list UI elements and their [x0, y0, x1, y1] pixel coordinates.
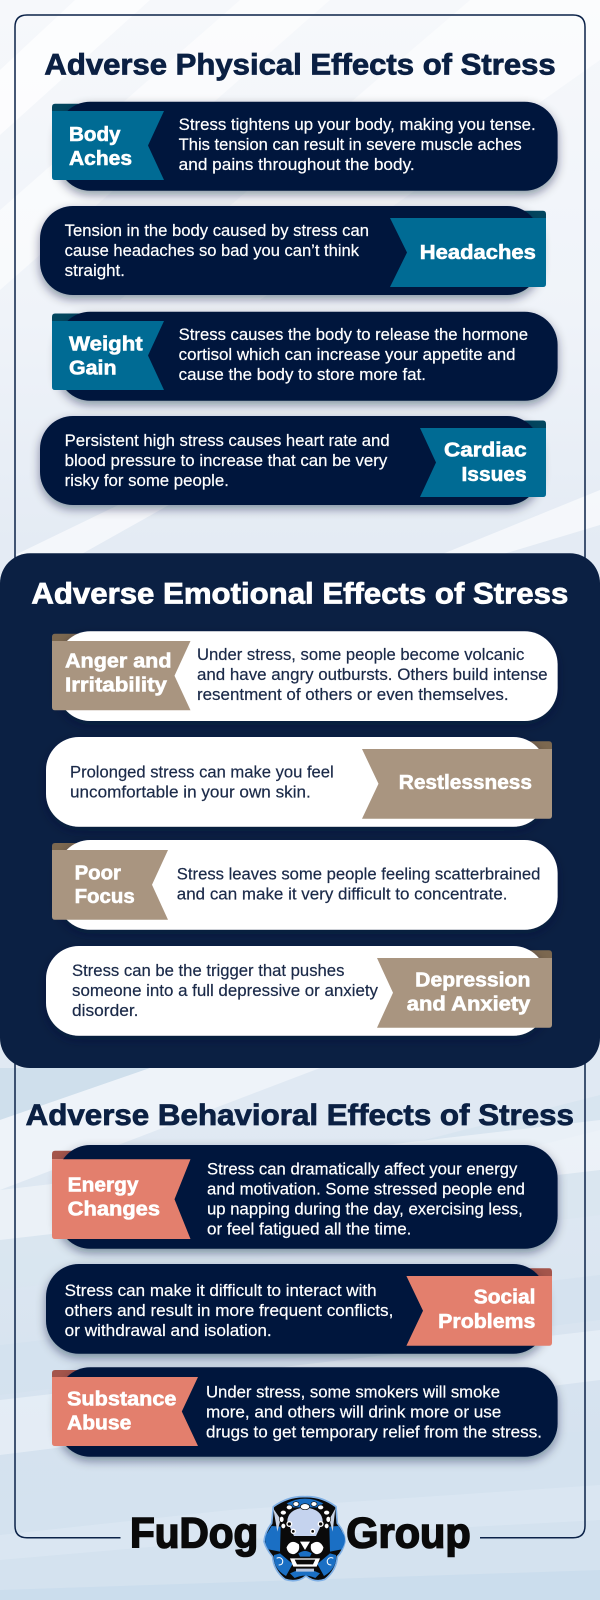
description: substance abuse: Under stress, some smokers will smoke [206, 1383, 500, 1401]
card: poor focus [52, 840, 558, 930]
heading: behavioral effects: Adverse Behavioral Effects of Stress [26, 1099, 574, 1132]
label: cardiac issues: Cardiac [444, 440, 527, 462]
heading: physical effects: Adverse Physical Effects of Stress [44, 48, 556, 82]
ribbon: anger and irritability [52, 641, 190, 710]
label: anger and irritability: Irritability [65, 675, 168, 697]
icon: fu dog lion head [264, 1497, 345, 1581]
description: anger and irritability: Under stress, some people become volcanic [197, 646, 524, 664]
label: body aches [69, 124, 132, 170]
description: anger and irritability: resentment of others or even themselves. [197, 686, 509, 704]
ribbon: poor focus [52, 850, 168, 920]
description: weight gain: Stress causes the body to release the hormone [179, 326, 528, 344]
card: depression and anxiety [46, 946, 552, 1036]
description: social problems [65, 1282, 393, 1340]
description: depression and anxiety: Stress can be the trigger that pushes [72, 962, 344, 980]
description: body aches: Stress tightens up your body, making you tense. [179, 116, 536, 134]
description: social problems: others and result in more frequent conflicts, [65, 1302, 393, 1320]
description: energy changes: and motivation. Some stressed people end [207, 1180, 525, 1198]
label: weight gain: Gain [69, 358, 116, 380]
description: headaches: straight. [65, 262, 125, 280]
description: weight gain: cortisol which can increase your appetite and [179, 346, 515, 364]
ribbon: social problems [406, 1276, 552, 1346]
description: restlessness [70, 763, 334, 801]
card: substance abuse [52, 1367, 558, 1457]
label: energy changes: Changes [68, 1198, 160, 1220]
ribbon: restlessness [362, 749, 552, 819]
card: energy changes [52, 1145, 558, 1249]
label: social problems [438, 1287, 535, 1333]
label: body aches: Aches [69, 148, 132, 170]
panel: emotional effects [0, 553, 600, 1068]
label: weight gain: Weight [69, 334, 143, 356]
card: body aches [52, 102, 558, 191]
wordmark: FuDog: FuDog [130, 1510, 258, 1558]
description: poor focus: and can make it very difficult to concentrate. [177, 885, 508, 903]
logo: FuDog Group [130, 1497, 471, 1581]
label: depression and anxiety: Depression [415, 970, 530, 992]
description: substance abuse: more, and others will drink more or use [206, 1403, 501, 1421]
label: poor focus: Focus [75, 886, 135, 908]
label: restlessness: Restlessness [399, 772, 532, 794]
description: poor focus [177, 865, 540, 903]
ribbon: energy changes [52, 1159, 190, 1239]
description: energy changes [207, 1160, 525, 1238]
description: energy changes: or feel fatigued all the time. [207, 1220, 411, 1238]
description: substance abuse: drugs to get temporary relief from the stress. [206, 1423, 542, 1441]
description: cardiac issues: Persistent high stress causes heart rate and [65, 432, 390, 450]
label: energy changes: Energy [68, 1175, 139, 1197]
label: poor focus [75, 862, 135, 908]
ribbon: substance abuse [52, 1377, 198, 1446]
heading: emotional effects: Adverse Emotional Effects of Stress [31, 577, 568, 610]
description: depression and anxiety [72, 962, 379, 1020]
description: body aches [179, 116, 536, 174]
label: substance abuse: Abuse [67, 1413, 131, 1435]
description: weight gain: cause the body to store more fat. [179, 366, 426, 384]
description: cardiac issues [65, 432, 390, 490]
label: energy changes [68, 1175, 160, 1220]
description: anger and irritability: and have angry outbursts. Others build intense [197, 666, 548, 684]
description: energy changes: Stress can dramatically affect your energy [207, 1160, 518, 1178]
label: depression and anxiety: and Anxiety [407, 994, 531, 1016]
label: headaches: Headaches [420, 242, 536, 264]
ribbon: headaches [390, 218, 546, 287]
description: social problems: or withdrawal and isolation. [65, 1322, 272, 1340]
description: poor focus: Stress leaves some people feeling scatterbrained [177, 865, 540, 883]
card: anger and irritability [52, 631, 558, 721]
label: poor focus: Poor [75, 862, 121, 884]
label: anger and irritability: Anger and [65, 651, 172, 673]
description: restlessness: Prolonged stress can make you feel [70, 763, 334, 781]
card: cardiac issues [40, 416, 546, 505]
label: social problems: Social [474, 1287, 535, 1309]
description: restlessness: uncomfortable in your own skin. [70, 783, 311, 801]
ribbon: cardiac issues [420, 428, 546, 497]
description: social problems: Stress can make it difficult to interact with [65, 1282, 377, 1300]
description: depression and anxiety: disorder. [72, 1002, 138, 1020]
card: headaches [40, 206, 546, 295]
description: headaches: Tension in the body caused by stress can [65, 222, 369, 240]
card: weight gain [52, 312, 558, 401]
ribbon: depression and anxiety [377, 958, 552, 1028]
label: cardiac issues [444, 440, 527, 486]
description: weight gain [179, 326, 528, 384]
description: body aches: This tension can result in severe muscle aches [179, 136, 522, 154]
label: substance abuse: Substance [67, 1389, 176, 1411]
label: social problems: Problems [438, 1311, 535, 1333]
label: cardiac issues: Issues [462, 464, 527, 486]
label: body aches: Body [69, 124, 121, 146]
description: cardiac issues: risky for some people. [65, 472, 229, 490]
description: substance abuse [206, 1383, 542, 1441]
description: headaches: cause headaches so bad you can’t think [65, 242, 360, 260]
card: restlessness [46, 737, 552, 827]
description: body aches: and pains throughout the body. [179, 156, 415, 174]
description: depression and anxiety: someone into a full depressive or anxiety [72, 982, 379, 1000]
description: cardiac issues: blood pressure to increase that can be very [65, 452, 388, 470]
label: anger and irritability [65, 651, 172, 697]
description: anger and irritability [197, 646, 548, 704]
wordmark: Group: Group [346, 1510, 471, 1558]
ribbon: body aches [52, 111, 164, 180]
label: weight gain [69, 334, 143, 380]
label: depression and anxiety [407, 970, 531, 1016]
card: social problems [46, 1264, 552, 1354]
description: headaches [65, 222, 369, 280]
description: energy changes: up napping during the day, exercising less, [207, 1200, 523, 1218]
ribbon: weight gain [52, 321, 164, 390]
label: substance abuse [67, 1389, 176, 1435]
